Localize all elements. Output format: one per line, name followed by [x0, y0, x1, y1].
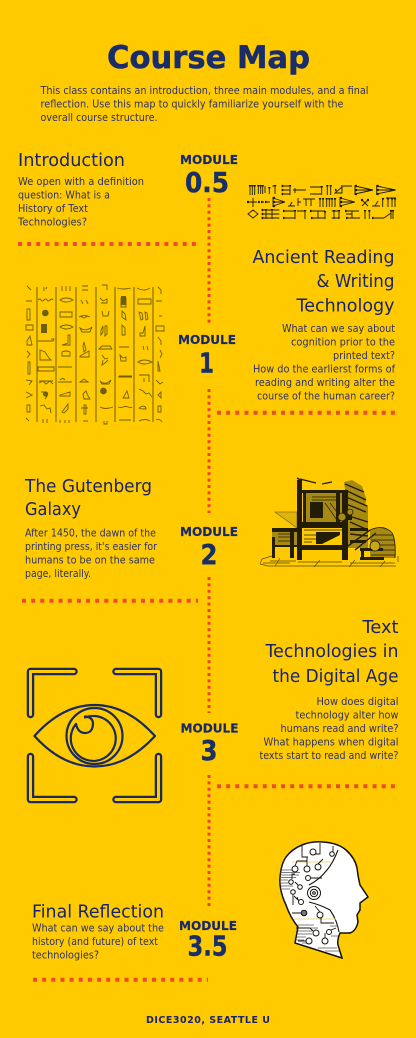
module 3.5 label: [179, 918, 237, 963]
introduction text: We open with a definition: [18, 176, 144, 188]
digital age text: technology alter how: [296, 710, 398, 722]
icon: eye in focus frame: [30, 672, 158, 800]
divider: [18, 242, 196, 246]
intro text: [40, 85, 369, 124]
final reflection text: history (and future) of text: [32, 936, 158, 948]
gutenberg text: [25, 528, 158, 580]
ancient text: [253, 323, 395, 402]
intro text: reflection. Use this map to quickly familiarize yourself with the: [40, 98, 344, 110]
digital age text: texts start to read and write?: [260, 750, 398, 762]
final reflection text: technologies?: [32, 950, 99, 962]
module 2 label: MODULE: [180, 524, 238, 539]
digital age heading: Text: [361, 618, 399, 638]
module 3.5 label: MODULE: [179, 918, 237, 933]
ancient text: What can we say about: [282, 323, 395, 335]
gutenberg text: page, literally.: [25, 568, 91, 580]
intro text: overall course structure.: [40, 112, 158, 124]
module 3.5 label: 3.5: [188, 930, 228, 963]
divider: [22, 599, 198, 603]
final reflection text: [32, 923, 164, 962]
module 1 label: 1: [199, 347, 214, 380]
footer: DICE3020, SEATTLE U: [146, 1015, 270, 1026]
module 1 label: MODULE: [178, 332, 236, 347]
ancient heading: & Writing: [316, 272, 394, 292]
module 2 label: 2: [200, 538, 218, 571]
panel: text technologies in the digital age: [217, 618, 399, 786]
introduction text: question: What is a: [18, 190, 110, 202]
module 3 label: 3: [200, 734, 218, 767]
module 0.5 label: MODULE: [180, 152, 238, 167]
central dotted timeline: [208, 198, 210, 908]
icon: cuneiform inscription: [247, 185, 396, 219]
introduction heading: Introduction: [18, 151, 125, 171]
divider: [217, 784, 395, 788]
module 2 label: [180, 524, 238, 571]
digital age heading: Technologies in: [265, 642, 398, 662]
digital age text: What happens when digital: [264, 736, 398, 748]
divider: [217, 411, 395, 415]
digital age text: How does digital: [316, 696, 398, 708]
ancient text: reading and writing alter the: [255, 377, 395, 389]
module 0.5 label: 0.5: [185, 166, 229, 199]
digital age text: humans read and write?: [280, 723, 398, 735]
panel: final reflection: [32, 903, 208, 980]
gutenberg text: After 1450, the dawn of the: [25, 528, 156, 540]
module 3 label: MODULE: [180, 721, 238, 736]
paper feed board: [275, 512, 297, 528]
final reflection heading: Final Reflection: [32, 903, 164, 923]
divider: [33, 978, 208, 982]
module 3 label: [180, 721, 238, 767]
ancient heading: Ancient Reading: [252, 248, 394, 268]
final reflection text: What can we say about the: [32, 923, 164, 935]
module 0.5 label: [180, 152, 238, 199]
ancient heading: [252, 248, 394, 316]
title: Course Map: [107, 40, 310, 76]
gutenberg heading: [24, 477, 152, 520]
panel: gutenberg galaxy: [22, 477, 198, 601]
digital age heading: the Digital Age: [272, 667, 398, 687]
introduction text: [17, 176, 144, 229]
icon: circuit head: [280, 842, 368, 958]
shading masses: [272, 480, 395, 558]
ancient heading: Technology: [296, 296, 394, 316]
icon: printing press: [260, 478, 398, 567]
ancient text: course of the human career?: [257, 390, 395, 402]
module 1 label: [178, 332, 236, 380]
gutenberg text: humans to be on the same: [25, 555, 155, 567]
intro text: This class contains an introduction, three main modules, and a final: [40, 85, 369, 97]
panel: introduction: [17, 151, 196, 244]
icon: hieroglyph panel: [26, 285, 164, 424]
gutenberg heading: Galaxy: [25, 500, 81, 520]
ancient text: cognition prior to the: [291, 336, 395, 348]
ancient text: printed text?: [333, 350, 395, 362]
introduction text: Technologies?: [17, 217, 87, 229]
ancient text: How do the earlierst forms of: [253, 364, 395, 376]
panel: ancient reading and writing: [217, 248, 395, 413]
introduction text: History of Text: [18, 203, 88, 215]
gutenberg text: printing press, it's easier for: [25, 541, 158, 553]
digital age text: [260, 696, 398, 762]
gutenberg heading: The Gutenberg: [24, 477, 152, 497]
digital age heading: [265, 618, 399, 687]
